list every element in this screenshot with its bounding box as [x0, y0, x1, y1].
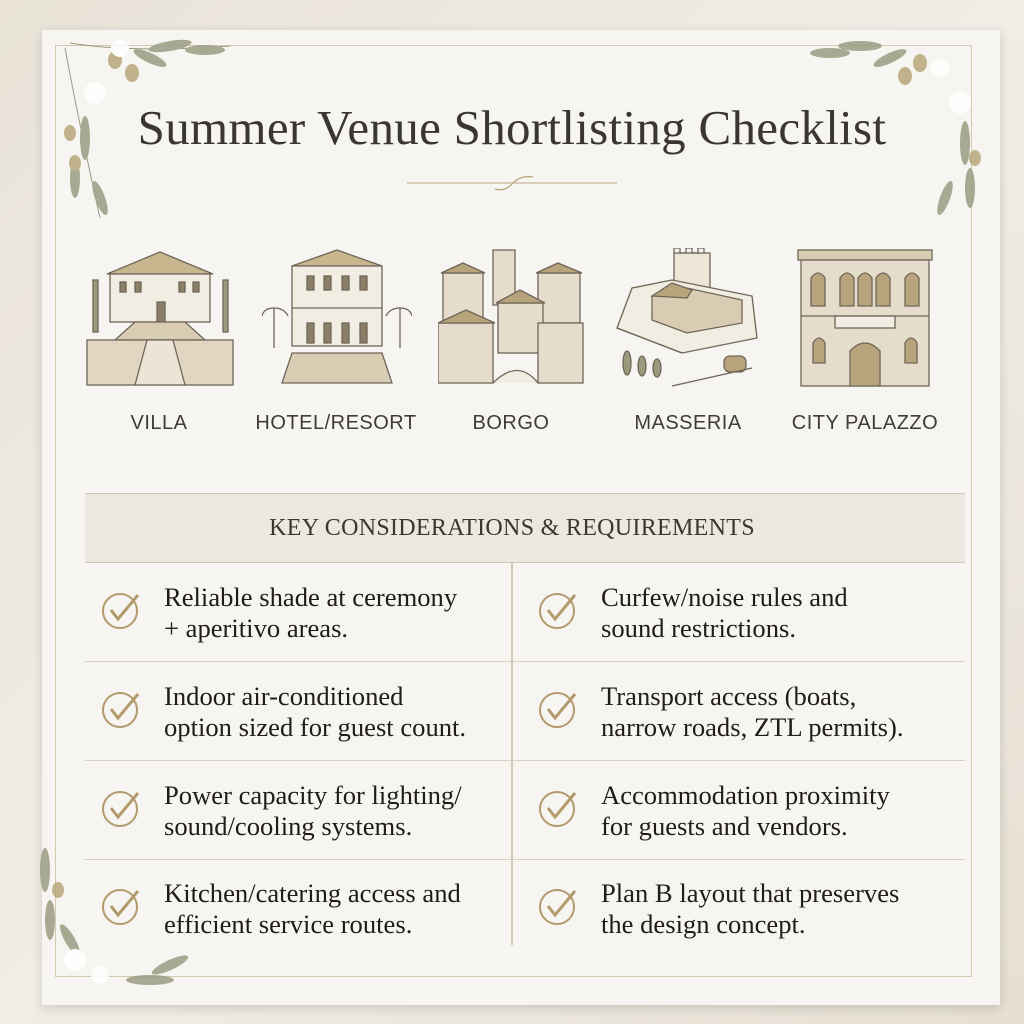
label: borgo: BORGO	[473, 412, 549, 434]
icon: city palazzo	[797, 249, 933, 387]
icon: borgo	[438, 249, 584, 384]
icon: masseria	[616, 248, 758, 387]
checklist grid: option sized for guest count.	[164, 712, 466, 742]
checklist grid: efficient service routes.	[164, 909, 412, 939]
decorative corner: top-left olive branch	[64, 39, 230, 218]
divider flourish	[407, 176, 617, 190]
checklist grid: Plan B layout that preserves	[601, 878, 899, 908]
item texts: Reliable shade at ceremony	[164, 582, 457, 612]
label: villa: VILLA	[130, 412, 187, 434]
checklist grid: Indoor air-conditioned	[164, 681, 403, 711]
label: masseria: MASSERIA	[634, 412, 742, 434]
checklist grid: sound/cooling systems.	[164, 811, 412, 841]
decorative corner: top-right olive branch	[810, 41, 981, 215]
checklist grid: the design concept.	[601, 909, 806, 939]
title: Summer Venue Shortlisting Checklist	[138, 100, 886, 155]
checklist grid: narrow roads, ZTL permits).	[601, 712, 904, 742]
header band	[85, 493, 965, 563]
label: city palazzo: CITY PALAZZO	[792, 412, 938, 434]
item texts: + aperitivo areas.	[164, 613, 348, 643]
checklist grid: Accommodation proximity	[601, 780, 890, 810]
checklist grid: Transport access (boats,	[601, 681, 856, 711]
item texts	[164, 582, 458, 643]
label: hotel/resort: HOTEL/RESORT	[255, 412, 417, 434]
header band: KEY CONSIDERATIONS & REQUIREMENTS	[269, 515, 755, 541]
decorative corner: bottom-left olive branch	[40, 848, 188, 985]
checklist grid: Curfew/noise rules and	[601, 582, 848, 612]
icon: villa	[86, 251, 234, 386]
checklist grid: sound restrictions.	[601, 613, 796, 643]
checklist grid: Kitchen/catering access and	[164, 878, 461, 908]
check icons	[102, 593, 576, 925]
checklist grid: for guests and vendors.	[601, 811, 848, 841]
icon: hotel/resort	[262, 249, 412, 384]
checklist grid: Power capacity for lighting/	[164, 780, 462, 810]
